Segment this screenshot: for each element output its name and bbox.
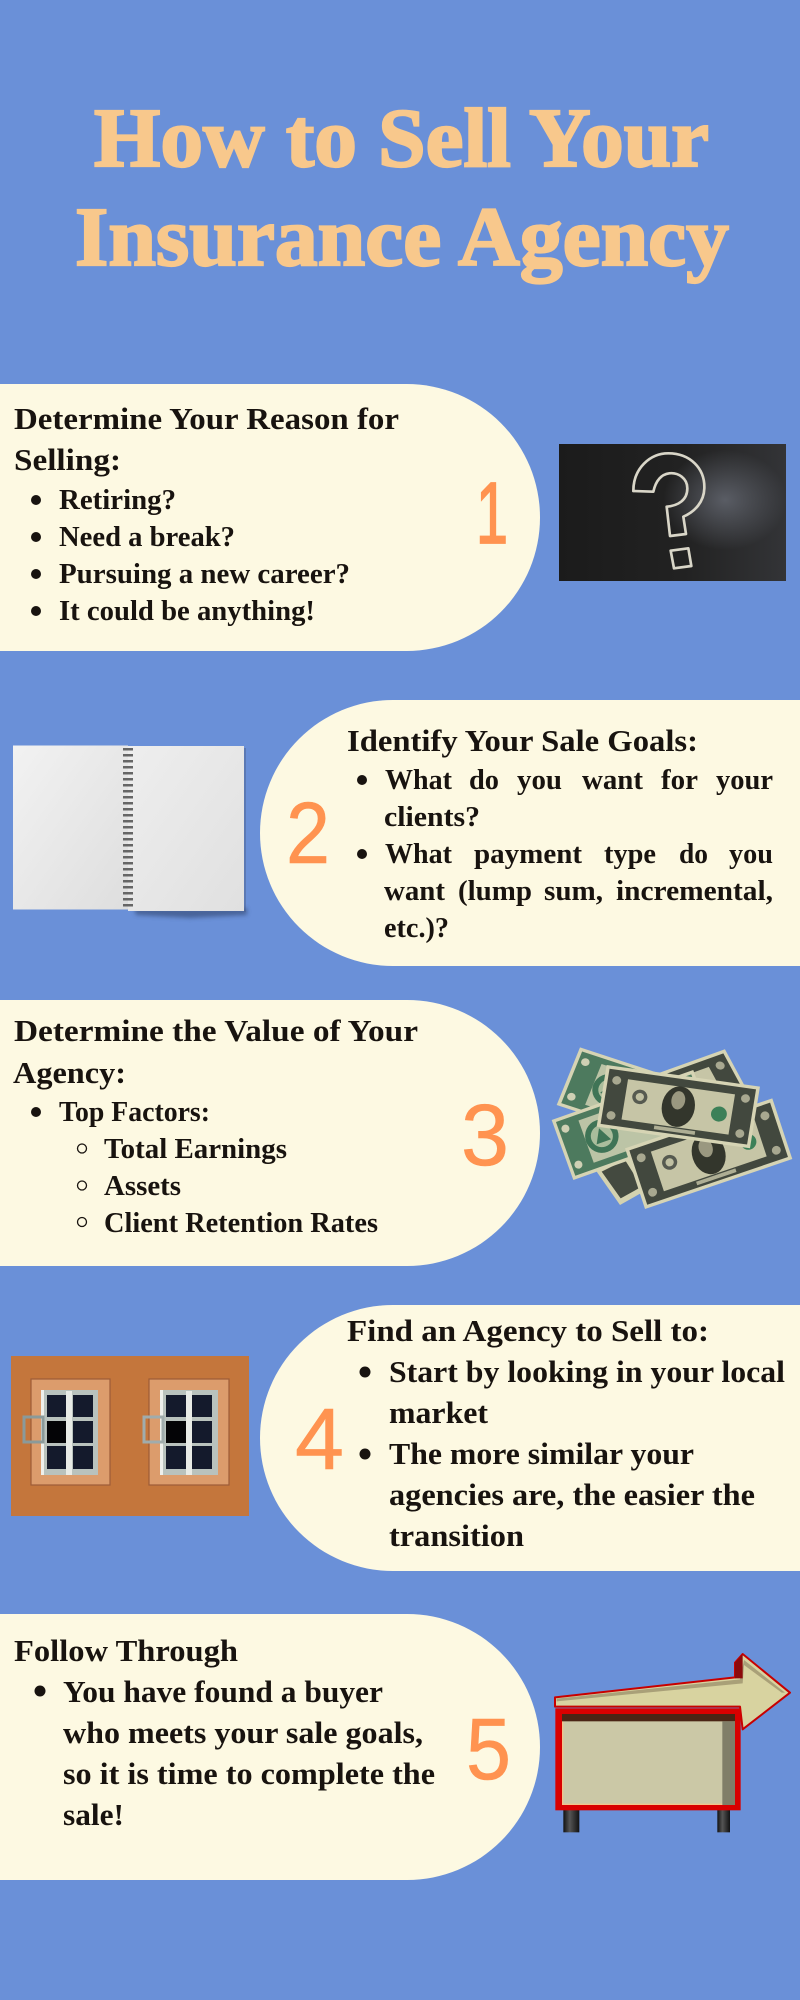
heading: step 1: Selling: [14,442,121,477]
bullet list: step 2: payment [474,838,582,870]
number 1: 1 [476,465,508,562]
bullet list: step 2: clients? [384,801,480,833]
bullet list: step 4: agencies are, the easier the [389,1477,755,1512]
bullet list: step 5: who meets your sale goals, [63,1715,423,1750]
heading: step 1: Determine Your Reason for [14,401,399,436]
bullet list: step 4: The more similar your [389,1436,694,1471]
bullet list: step 2 [357,764,773,944]
bullet list: step 2: for [661,764,698,796]
bullet list: step 3 [31,1096,378,1239]
bullet list: step 2: incremental, [616,875,773,907]
bullet list: step 2: What [385,764,452,796]
bullet list: step 1: It could be anything! [59,595,315,627]
icon: dollar bills [552,1047,792,1209]
bullet list: step 2: your [716,764,773,796]
heading: step 1 [14,401,399,477]
number 4: 4 [295,1391,344,1488]
bullet list: step 2: etc.)? [384,912,449,944]
icon: spiral notebook [13,746,247,918]
panel: step 1 reason for selling [0,384,540,651]
bullet list: step 4: market [389,1395,489,1430]
bullet list: step 4 [360,1354,785,1553]
bullet list: step 5: sale! [63,1797,124,1832]
panel: step 4 find an agency [260,1305,800,1571]
bullet list: step 3: Total Earnings [104,1133,287,1165]
panel: step 2 sale goals [260,700,800,966]
bullet list: step 2: do [679,838,708,870]
bullet list: step 1 [31,484,350,627]
heading: step 3 [13,1013,418,1090]
title [75,92,729,284]
title: How to Sell Your [94,92,709,185]
bullet list: step 2: do [469,764,499,796]
icon: arrow sign [555,1654,790,1832]
bullet list: step 5 [34,1674,435,1832]
number 2: 2 [286,785,330,882]
title: Insurance Agency [75,191,729,284]
heading: step 5: Follow Through [14,1633,238,1668]
icon: chalkboard question mark [559,444,787,581]
number 3: 3 [461,1087,509,1184]
heading: step 3: Determine the Value of Your [14,1013,418,1048]
icon: orange wall with windows [11,1356,249,1516]
bullet list: step 2: want [582,764,643,796]
bullet list: step 2: you [517,764,562,796]
bullet list: step 4: transition [389,1518,524,1553]
heading: step 3: Agency: [13,1055,126,1090]
bullet list: step 3: Top Factors: [59,1096,210,1128]
bullet list: step 5: You have found a buyer [63,1674,383,1709]
bullet list: step 2: type [604,838,656,870]
bullet list: step 2: What [385,838,452,870]
bullet list: step 1: Need a break? [59,521,235,553]
heading: step 2: Identify Your Sale Goals: [347,723,698,758]
bullet list: step 4: Start by looking in your local [389,1354,785,1389]
bullet list: step 2: want [384,875,445,907]
bullet list: step 2: sum, [544,875,603,907]
bullet list: step 2: you [729,838,773,870]
number 5: 5 [466,1701,511,1798]
bullet list: step 1: Pursuing a new career? [59,558,350,590]
bullet list: step 1: Retiring? [59,484,176,516]
bullet list: step 3: Client Retention Rates [104,1207,378,1239]
bullet list: step 2: (lump [458,875,532,907]
bullet list: step 3: Assets [104,1170,181,1202]
panel: step 5 follow through [0,1614,540,1880]
panel: step 3 value of agency [0,1000,540,1266]
heading: step 4: Find an Agency to Sell to: [347,1313,709,1348]
bullet list: step 5: so it is time to complete the [63,1756,435,1791]
